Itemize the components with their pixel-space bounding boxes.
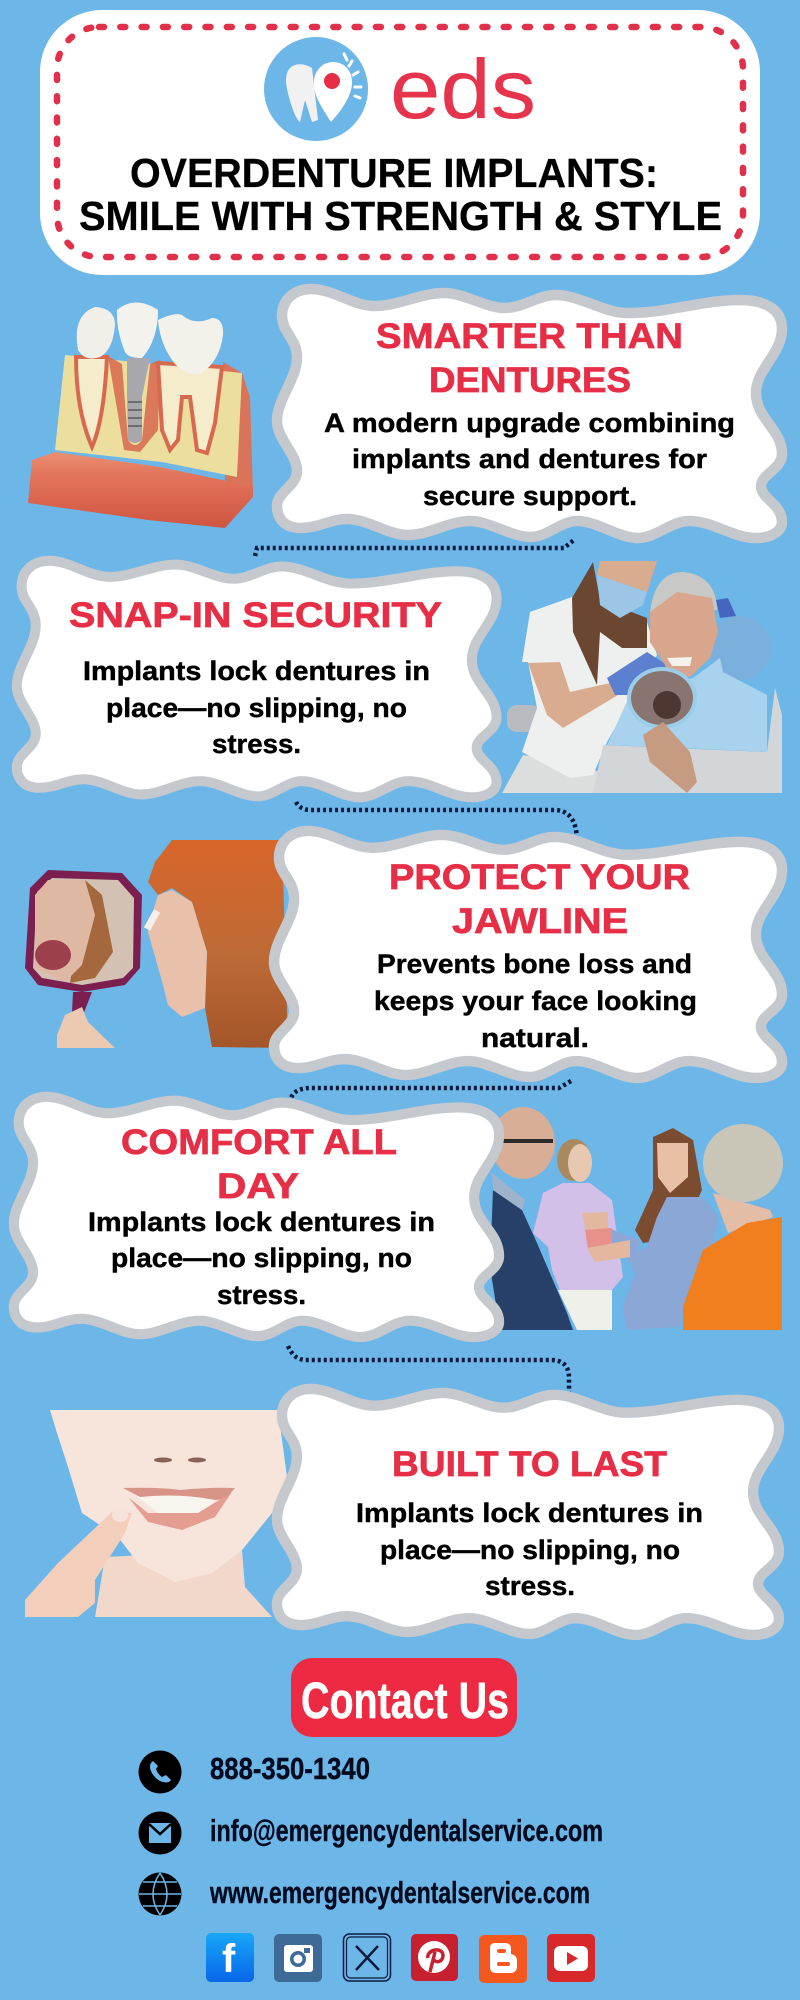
icon: facebook [206, 1933, 254, 1982]
body text [356, 1498, 703, 1601]
social icons [206, 1933, 595, 1983]
website address: www.emergencydentalservice.com [209, 1875, 590, 1910]
title: OVERDENTURE IMPLANTS: [130, 150, 658, 196]
body text [83, 656, 430, 759]
contact us button [291, 1658, 517, 1737]
photo: woman checking teeth in hand mirror [25, 840, 288, 1048]
connector: panel 4 to panel 5 [288, 1346, 569, 1396]
body text [374, 949, 697, 1053]
icon: facebook: f [222, 1937, 236, 1981]
icon: youtube [547, 1934, 595, 1982]
heading: JAWLINE [452, 902, 628, 941]
panel: built to last [277, 1389, 779, 1635]
connector: panel 1 to panel 2 [255, 540, 574, 556]
icon: instagram [274, 1934, 322, 1982]
icon: blogger [479, 1935, 527, 1983]
heading: PROTECT YOUR [389, 858, 690, 897]
connector: panel 3 to panel 4 [290, 1081, 571, 1103]
body text [88, 1207, 435, 1310]
body text: place—no slipping, no [106, 693, 407, 723]
icon: globe [138, 1872, 182, 1916]
body text: A modern upgrade combining [324, 408, 735, 438]
title: SMILE WITH STRENGTH & STYLE [79, 193, 722, 239]
heading: DENTURES [429, 361, 631, 400]
heading: COMFORT ALL [121, 1123, 397, 1162]
body text: secure support. [423, 481, 637, 511]
body text: Implants lock dentures in [356, 1498, 703, 1528]
body text [324, 408, 735, 511]
body text: Prevents bone loss and [377, 949, 692, 979]
logo icon: tooth and location pin [264, 37, 368, 141]
heading: SNAP-IN SECURITY [69, 596, 442, 635]
photo: dentist showing model to patients [490, 1107, 783, 1330]
icon: envelope [138, 1812, 182, 1854]
panel: smarter than dentures [277, 289, 782, 538]
body text: stress. [212, 729, 301, 759]
connector: panel 2 to panel 3 [296, 802, 577, 842]
title [79, 150, 722, 239]
contact row: email [138, 1812, 603, 1854]
body text: Implants lock dentures in [88, 1207, 435, 1237]
body text: place—no slipping, no [111, 1243, 412, 1273]
phone number: 888-350-1340 [210, 1751, 370, 1786]
icon: phone [138, 1750, 182, 1794]
panel: snap-in security [17, 561, 497, 797]
contact us button: Contact Us [301, 1672, 509, 1729]
heading [389, 858, 690, 941]
body text: keeps your face looking [374, 986, 697, 1016]
body text: stress. [217, 1280, 306, 1310]
heading: BUILT TO LAST [392, 1445, 667, 1484]
body text: place—no slipping, no [380, 1535, 680, 1565]
photo: dentist and patient with mirror [502, 561, 782, 793]
header panel [40, 10, 760, 275]
icon: x [344, 1934, 390, 1981]
body text: natural. [481, 1023, 589, 1053]
heading: DAY [217, 1167, 299, 1206]
contact row: phone [138, 1750, 370, 1794]
panel: protect your jawline [274, 831, 782, 1078]
photo: dental implant model [28, 302, 253, 528]
heading [376, 317, 683, 400]
body text: Implants lock dentures in [83, 656, 430, 686]
logo wordmark: eds [390, 42, 536, 136]
body text: implants and dentures for [352, 444, 708, 474]
heading: SMARTER THAN [376, 317, 683, 356]
email address: info@emergencydentalservice.com [210, 1813, 603, 1848]
photo: smiling mouth with finger [25, 1410, 287, 1617]
body text: stress. [485, 1571, 575, 1601]
heading [121, 1123, 397, 1206]
panel: comfort all day [14, 1097, 499, 1337]
icon: pinterest [411, 1934, 458, 1981]
contact row: website [138, 1872, 590, 1916]
